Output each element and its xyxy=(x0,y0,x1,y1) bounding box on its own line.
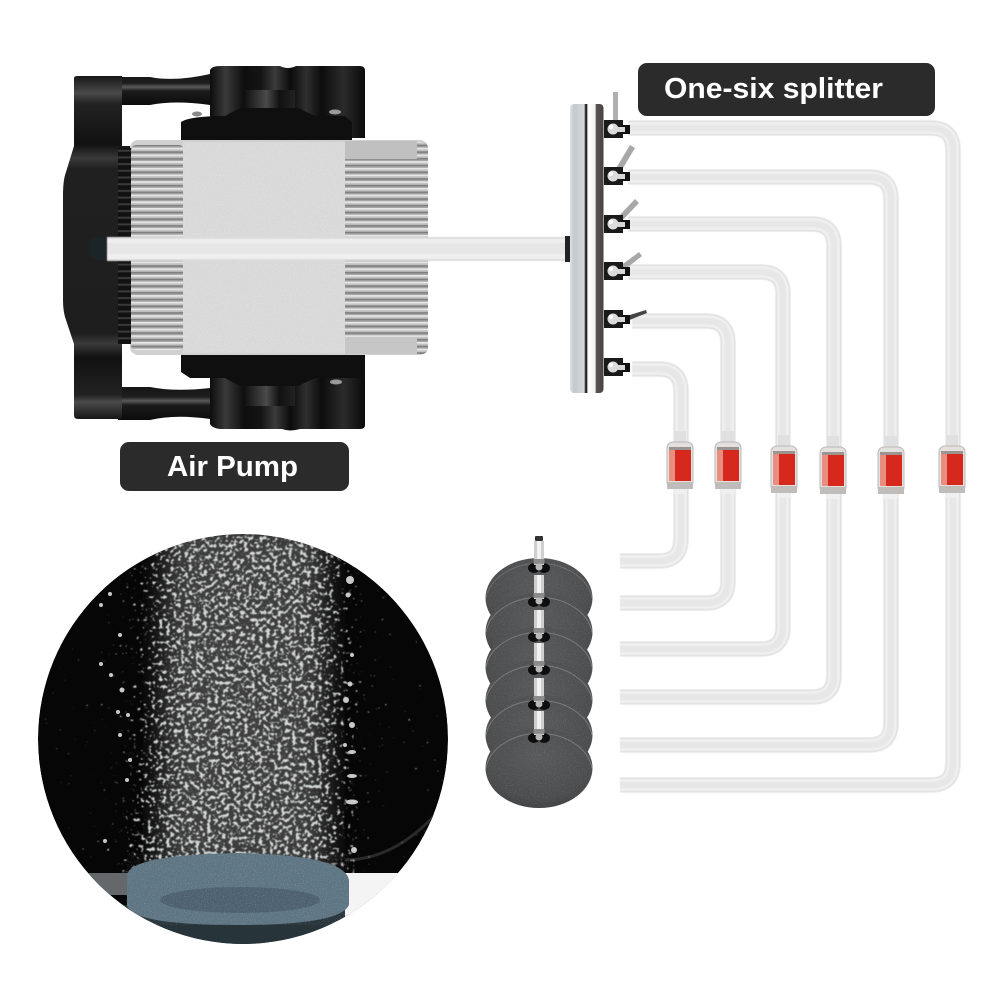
air stone 1 xyxy=(486,558,592,638)
air stone side xyxy=(127,853,349,925)
pump top cylinder head xyxy=(210,66,365,138)
air stone grain xyxy=(127,853,349,925)
stack of air stones xyxy=(486,536,593,808)
bubble column xyxy=(128,500,350,900)
inlet collar xyxy=(565,236,570,262)
check valve 4 xyxy=(820,436,846,499)
air stone 6 xyxy=(486,728,592,808)
valve 1 with lever xyxy=(604,92,630,138)
air stone 3 xyxy=(486,627,592,707)
top flange screw right xyxy=(329,110,341,114)
left comb edge xyxy=(118,148,132,344)
air stone reflection xyxy=(122,905,350,944)
valve 2 with lever xyxy=(604,145,635,185)
pump left end cap xyxy=(63,76,130,419)
pump bottom flange xyxy=(181,355,365,386)
label: One-six splitter: One-six splitter xyxy=(664,73,883,105)
right fin shading xyxy=(345,141,417,159)
bottom flange screw xyxy=(330,380,342,384)
check valve 2 xyxy=(715,431,741,494)
stray bubbles xyxy=(99,576,358,853)
pump top bracket arm xyxy=(118,74,210,105)
tubing to air stones xyxy=(620,128,953,785)
stone grain xyxy=(486,558,593,808)
tube 1 xyxy=(620,128,953,785)
pump top flange xyxy=(181,108,352,140)
shelf glare xyxy=(345,873,398,917)
air stone 2 xyxy=(486,592,592,672)
air stone 5 xyxy=(486,695,592,775)
left cooling fins xyxy=(131,145,184,350)
air nipples xyxy=(528,541,550,743)
valve 3 with lever xyxy=(604,199,639,233)
tube 2 xyxy=(620,177,891,745)
soft bubble column glow xyxy=(160,520,328,870)
label: One-six splitter xyxy=(638,63,935,116)
photo: bubbles rising from an air stone xyxy=(38,534,448,944)
stone arcs xyxy=(486,597,592,768)
valve 4 with lever xyxy=(604,252,642,280)
centre panel texture xyxy=(183,142,345,353)
top flange screw xyxy=(192,112,202,116)
dark water background xyxy=(38,534,448,944)
pump bottom outlet xyxy=(243,386,295,406)
pump bottom bracket arm xyxy=(118,387,210,420)
submerged pipe xyxy=(88,873,128,895)
air stone shadow band xyxy=(160,887,320,913)
check valve 1 xyxy=(667,431,693,494)
air pump xyxy=(63,66,567,430)
label: Air Pump xyxy=(120,442,349,491)
inline check valves xyxy=(667,431,965,499)
pump top outlet xyxy=(243,90,295,110)
main air hose xyxy=(107,237,567,261)
right cooling fins xyxy=(345,142,428,354)
valve 6 xyxy=(604,358,630,376)
dim curved background streak xyxy=(345,814,434,862)
label: Air Pump: Air Pump xyxy=(167,451,298,483)
top nozzle tip xyxy=(535,536,543,541)
tube 6 xyxy=(620,369,681,561)
check valve 6 xyxy=(939,435,965,498)
tube 5 xyxy=(620,321,728,603)
air stone 4 xyxy=(486,660,592,740)
tube 3 xyxy=(620,224,834,697)
check valve 3 xyxy=(771,435,797,498)
check valve 5 xyxy=(878,436,904,499)
pump hose nipple xyxy=(90,236,107,261)
chrome bar xyxy=(570,104,604,393)
splitter manifold xyxy=(565,92,647,393)
pump bottom cylinder head xyxy=(210,378,365,430)
valve 5 with lever xyxy=(604,310,647,328)
right fin lower shading xyxy=(345,337,417,354)
tube 4 xyxy=(620,272,783,649)
pump motor core xyxy=(130,140,428,355)
centre panel xyxy=(183,142,345,353)
